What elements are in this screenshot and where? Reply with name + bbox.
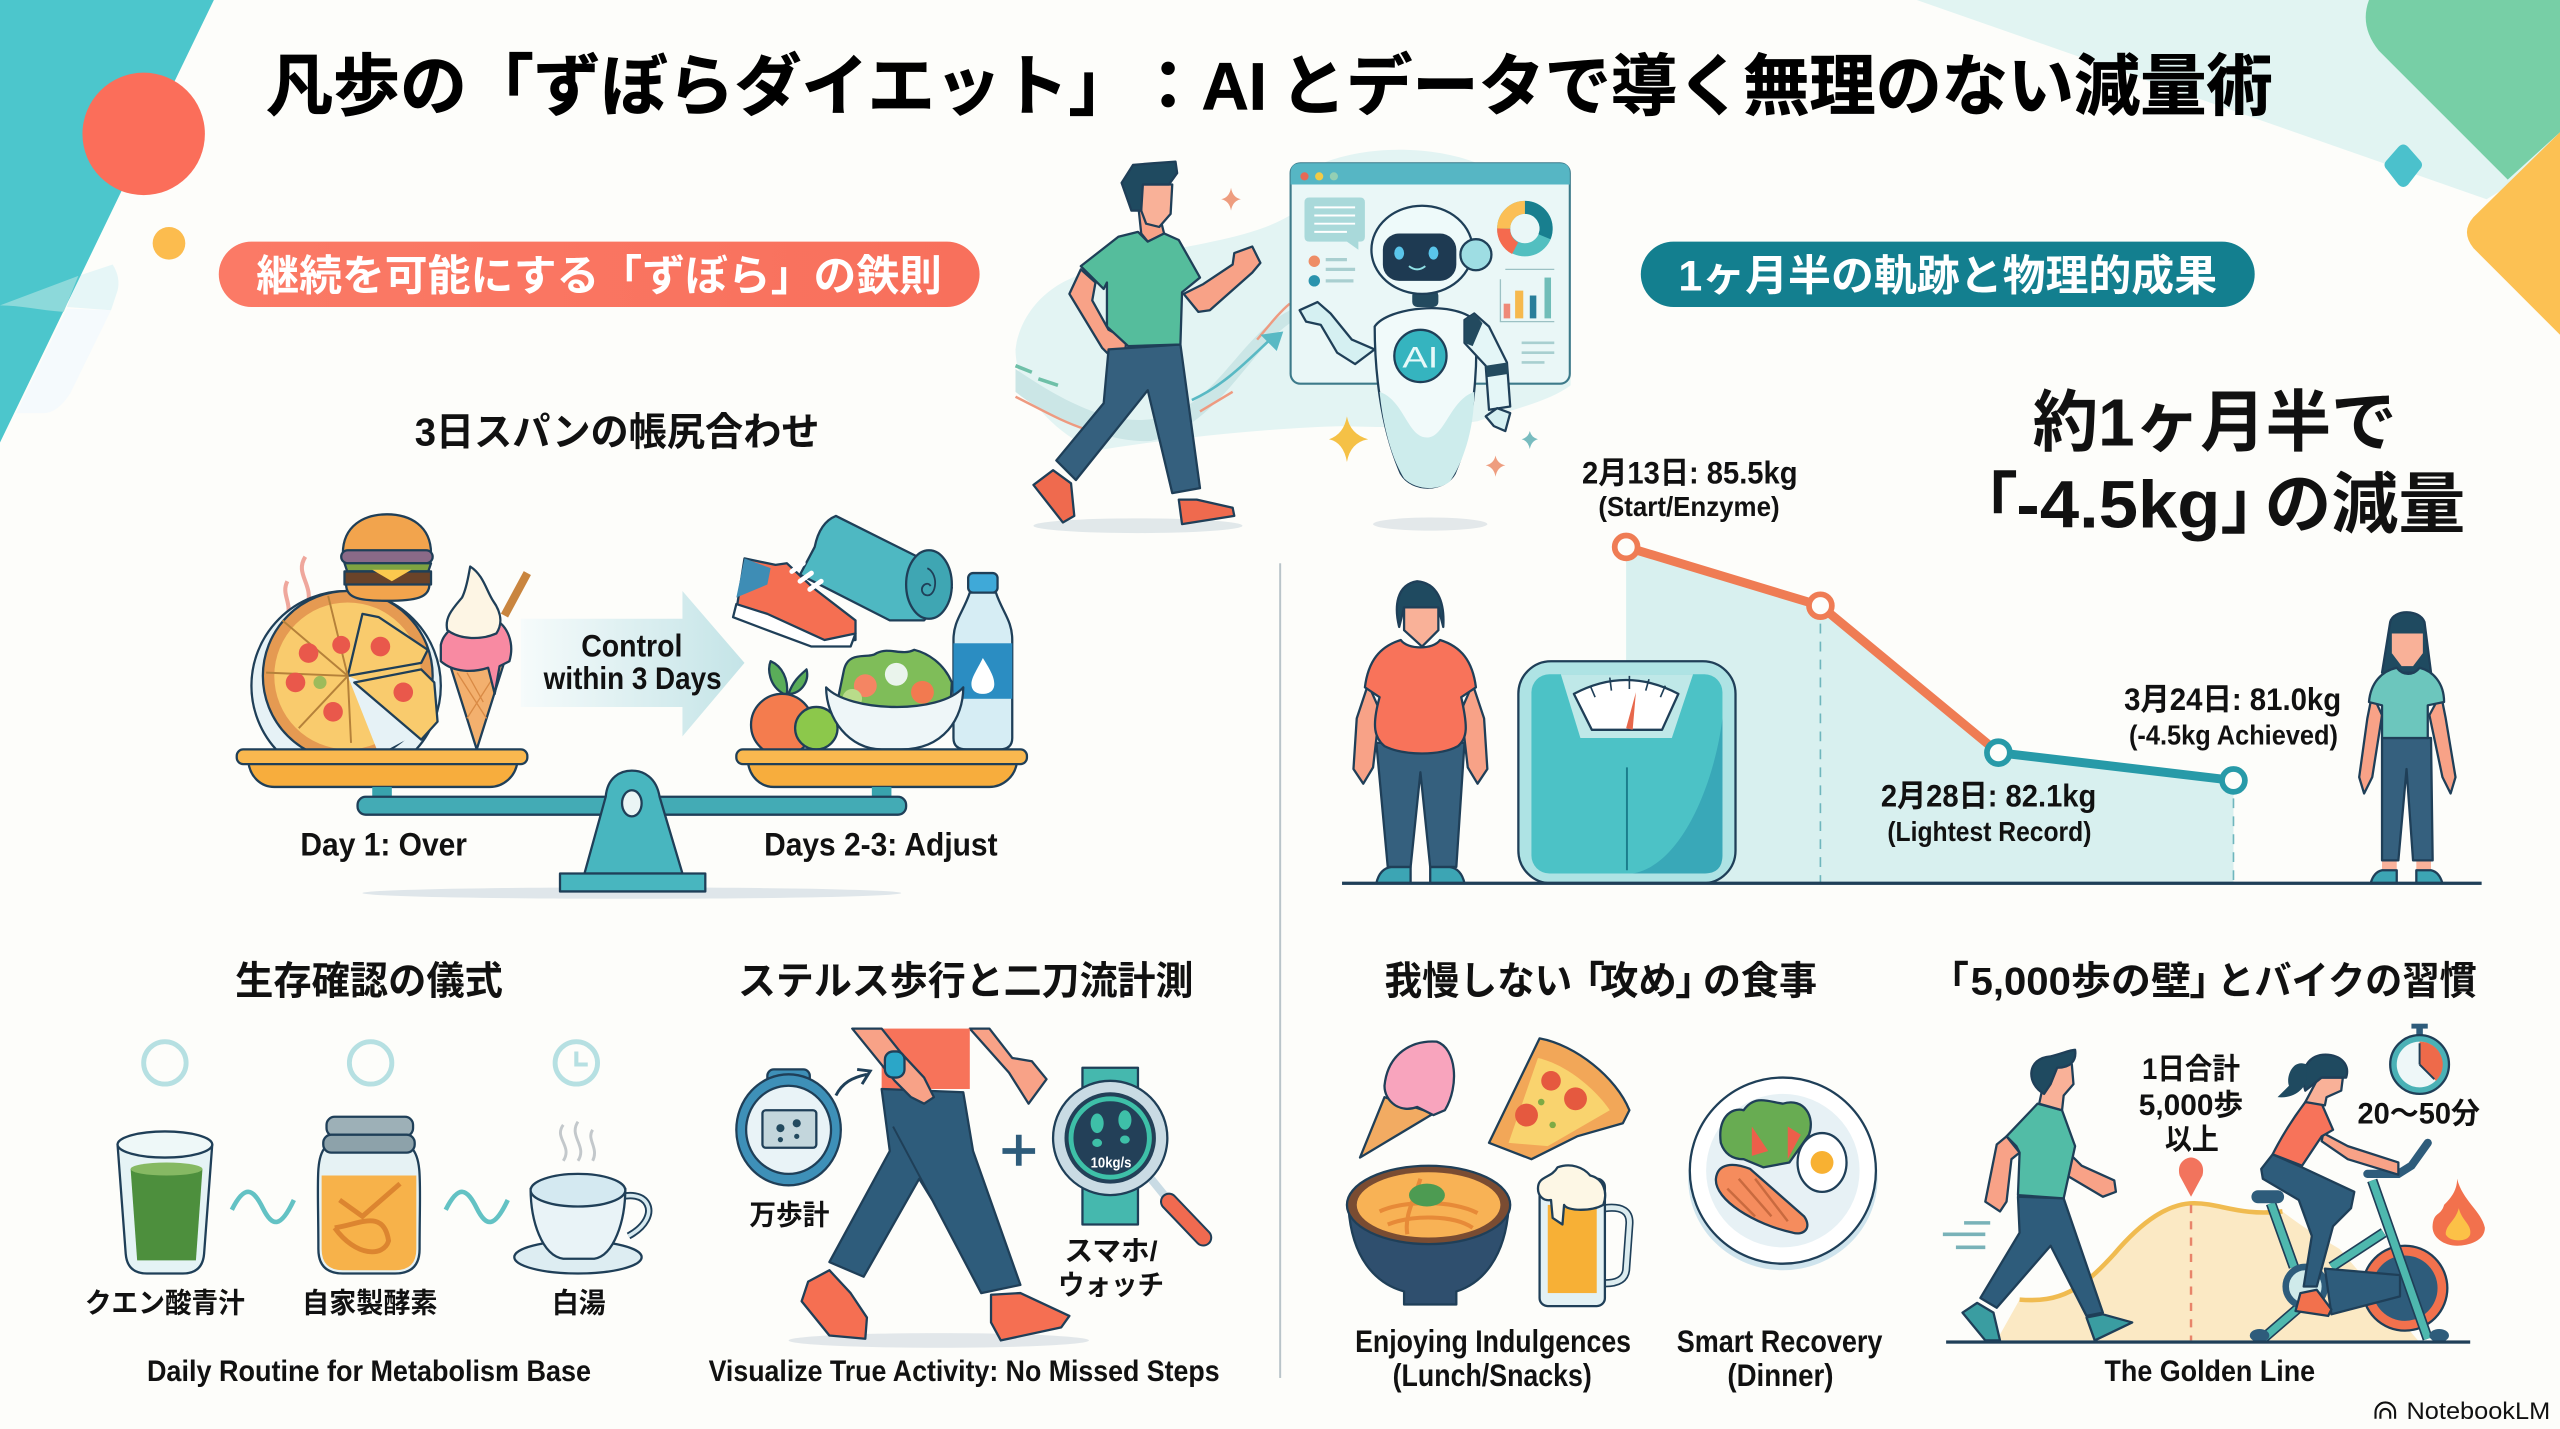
meal captions [1355, 1324, 1883, 1393]
person before [1353, 581, 1487, 883]
pizza slice [1489, 1038, 1629, 1159]
scale shadow [362, 887, 901, 899]
result headline: 「 [1951, 467, 2018, 542]
data label: Feb 13: (Start/Enzyme) [1598, 491, 1780, 522]
result headline: 約1ヶ月半で [2033, 386, 2397, 461]
donburi bowl [1347, 1166, 1510, 1304]
wave [232, 1192, 294, 1222]
weight line chart [1582, 455, 2341, 883]
control arrow [521, 591, 744, 736]
left section pill: 継続を可能にする「ずぼら」の鉄則 [256, 253, 942, 300]
caption: Daily Routine for Metabolism Base [147, 1355, 591, 1388]
panel: stealth walking [709, 960, 1220, 1388]
heading: 「 [1930, 960, 1969, 1003]
pedometer [736, 1069, 841, 1185]
golden line hump [1997, 1158, 2418, 1340]
heading: 」 [1675, 960, 1714, 1003]
sparkles [1221, 188, 1538, 477]
heading: 」 [2189, 960, 2229, 1003]
title: 凡歩の「ずぼらダイエット」 [266, 49, 1135, 124]
control text: within 3 Days [543, 661, 722, 696]
title: AI [1202, 49, 1267, 124]
water bottle [953, 573, 1012, 749]
balance scale illustration [237, 514, 1027, 899]
panel: aggressive meals [1347, 960, 1883, 1393]
left pan [237, 749, 527, 787]
background shapes [0, 0, 2560, 442]
step goal label: 5,000歩 [2139, 1089, 2243, 1122]
ground line [1946, 1340, 2470, 1344]
right section pill: 1ヶ月半の軌跡と物理的成果 [1678, 253, 2217, 300]
drink labels: 白湯 [552, 1288, 606, 1319]
data label: Mar 24: (-4.5kg Achieved) [2129, 719, 2338, 750]
burger [341, 514, 433, 601]
drink labels [85, 1288, 606, 1319]
AI robot: AI [1402, 341, 1438, 374]
ice cream cone [441, 567, 527, 749]
data label: Mar 24 [2124, 682, 2341, 750]
beer mug [1538, 1165, 1629, 1306]
heading: 生存確認の儀式 [235, 960, 503, 1003]
heading: 攻め [1600, 960, 1677, 1003]
ice cream [1360, 1042, 1454, 1158]
hero illustration: walking man and AI robot [1016, 150, 1571, 533]
heading [1930, 960, 2477, 1003]
left section pill [219, 242, 980, 307]
stopwatch [2390, 1024, 2449, 1094]
exercise bike and rider [2250, 1055, 2449, 1342]
plus [1002, 1135, 1035, 1166]
heading: 我慢しない [1384, 960, 1572, 1003]
meal captions: (Lunch/Snacks) [1393, 1358, 1592, 1393]
heading: とバイクの習慣 [2217, 960, 2477, 1003]
man walking [1033, 162, 1260, 533]
smartphone watch label [1058, 1235, 1164, 1301]
smartphone watch label: ウォッチ [1058, 1270, 1164, 1301]
title: とデータで導く無理のない減量術 [1280, 49, 2273, 124]
heading: の食事 [1703, 960, 1817, 1003]
right pan [736, 749, 1027, 787]
result headline: の減量 [2264, 467, 2465, 542]
data label: Mar 24: 3月24日: 81.0kg [2124, 682, 2341, 717]
title: ： [1135, 49, 1202, 124]
walking legs figure [789, 1029, 1089, 1348]
panel: 5000 steps and bike [1930, 960, 2485, 1388]
pedometer label: 万歩計 [749, 1200, 830, 1230]
smartwatch under magnifier [1053, 1068, 1203, 1238]
arrow from pedometer [836, 1069, 870, 1096]
meal captions: Enjoying Indulgences [1355, 1324, 1631, 1359]
scale beam and fulcrum [358, 771, 906, 891]
result headline: -4.5kg [2016, 467, 2220, 542]
data label: Feb 28: 2月28日: 82.1kg [1881, 779, 2096, 814]
center divider [1279, 563, 1281, 1378]
day 1 label: Day 1: Over [300, 826, 467, 863]
heading: 3 day balance: 3日スパンの帳尻合わせ [415, 412, 820, 455]
NotebookLM watermark: NotebookLM [2407, 1399, 2550, 1425]
duration label: 20～50分 [2358, 1097, 2480, 1130]
heading: 5,000歩の壁 [1971, 960, 2191, 1003]
heading: 「 [1566, 960, 1605, 1003]
speed lines [1943, 1223, 1990, 1247]
walking man [1962, 1050, 2132, 1340]
step goal label [2139, 1053, 2243, 1156]
result headline [1951, 386, 2465, 542]
heading: ステルス歩行と二刀流計測 [738, 960, 1193, 1003]
bathroom scale [1518, 661, 1736, 883]
AI robot [1300, 206, 1510, 531]
result headline: 」 [2220, 467, 2287, 542]
meal captions: (Dinner) [1727, 1358, 1833, 1393]
smartphone watch label: スマホ/ [1064, 1235, 1158, 1266]
flame [2433, 1179, 2485, 1246]
drink labels: クエン酸青汁 [85, 1288, 245, 1319]
fruit and salad [751, 650, 963, 756]
running shoe [733, 558, 856, 647]
heading [1384, 960, 1817, 1003]
data label: Feb 13: 2月13日: 85.5kg [1582, 455, 1798, 490]
days 2-3 label: Days 2-3: Adjust [764, 826, 998, 863]
control text [543, 628, 722, 696]
caption: The Golden Line [2104, 1355, 2315, 1388]
right section pill [1641, 242, 2255, 307]
AI dashboard screen [1291, 163, 1570, 384]
drink labels: 自家製酵素 [302, 1288, 438, 1319]
data label: Feb 28: (Lightest Record) [1887, 816, 2091, 847]
title [266, 49, 2273, 124]
yoga mat [800, 516, 952, 620]
data label: Feb 28 [1881, 779, 2096, 847]
steam [285, 557, 309, 617]
cup of hot water [514, 1122, 649, 1273]
wave [446, 1192, 508, 1222]
salmon dinner plate [1688, 1078, 1878, 1270]
glass of green juice [118, 1131, 212, 1273]
person after [2359, 612, 2456, 883]
panel: daily ritual [85, 960, 649, 1388]
smartwatch under magnifier: 10kg/s [1091, 1155, 1131, 1171]
icon: morning circles [144, 1042, 598, 1084]
pizza on plate [251, 591, 441, 780]
meal captions: Smart Recovery [1677, 1324, 1883, 1359]
data label: Feb 13 [1582, 455, 1798, 522]
enzyme jar [318, 1117, 420, 1273]
step goal label: 以上 [2165, 1123, 2219, 1156]
step goal label: 1日合計 [2142, 1053, 2240, 1086]
control text: Control [581, 628, 682, 663]
chart baseline [1342, 882, 2482, 885]
caption: Visualize True Activity: No Missed Steps [709, 1355, 1220, 1388]
